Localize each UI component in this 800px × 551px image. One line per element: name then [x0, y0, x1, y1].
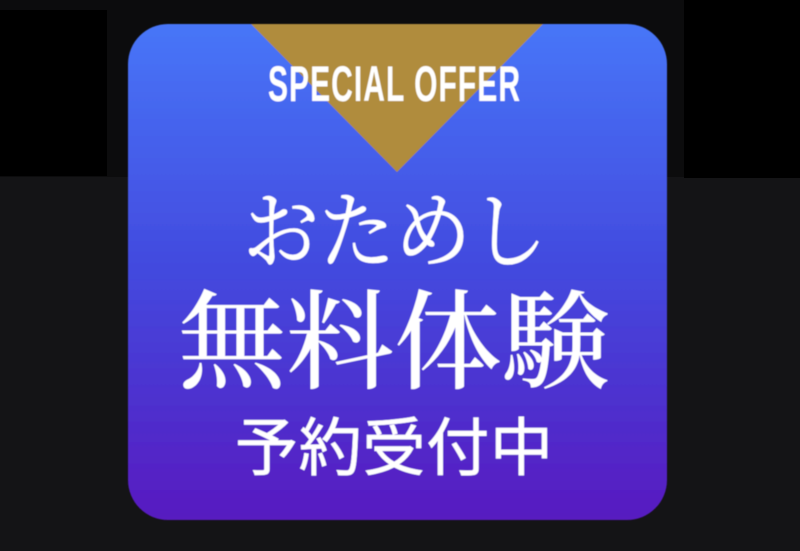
- offer card: [128, 24, 667, 520]
- black panel: left: [0, 10, 107, 176]
- card background: [128, 24, 667, 520]
- label: special offer: SPECIAL OFFER: [268, 56, 520, 112]
- heading: otameshi: おためし: [243, 187, 547, 280]
- heading: free trial: 無料体験: [178, 285, 610, 404]
- gold triangle ribbon: [251, 24, 543, 172]
- text: reservations open: 予約受付中: [235, 414, 553, 484]
- black panel: right: [684, 0, 800, 178]
